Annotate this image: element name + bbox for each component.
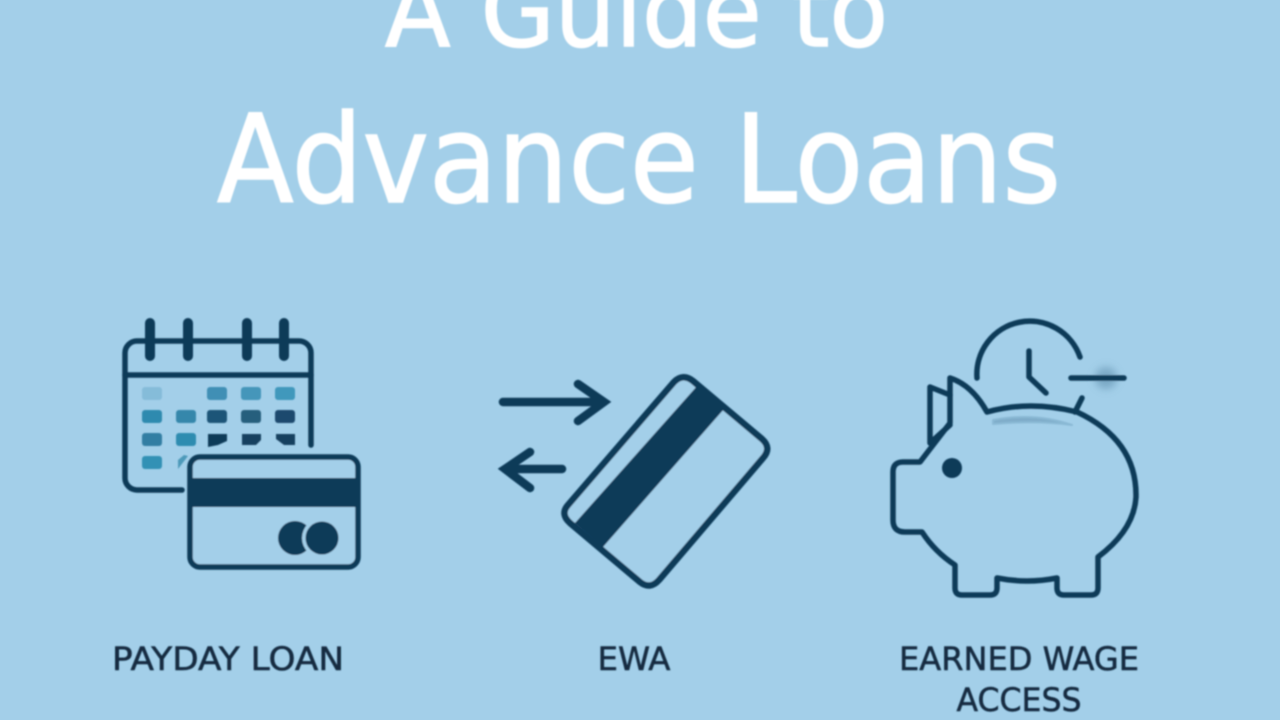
tilted card (564, 377, 767, 586)
icon: piggy bank with clock (893, 321, 1136, 595)
arrow: left (505, 452, 562, 488)
icon: calendar with payment card (125, 323, 358, 567)
calendar day cells (142, 387, 295, 469)
pig ear (930, 387, 950, 443)
pig eye (942, 458, 962, 478)
clock (977, 321, 1124, 412)
label: access: ACCESS (956, 681, 1082, 719)
smudge marks (993, 367, 1117, 425)
labels (112, 640, 1139, 719)
label: payday loan: PAYDAY LOAN (112, 640, 344, 678)
calendar frame (125, 323, 311, 490)
title line: Advance Loans: Advance Loans (217, 89, 1061, 231)
label: EWA: EWA (598, 640, 671, 678)
icon: swiped card with arrows (503, 377, 767, 586)
payment card (190, 457, 358, 567)
pig body (893, 378, 1136, 595)
arrow: right (503, 384, 604, 421)
title (217, 0, 1061, 231)
label: earned wage: EARNED WAGE (899, 640, 1139, 678)
